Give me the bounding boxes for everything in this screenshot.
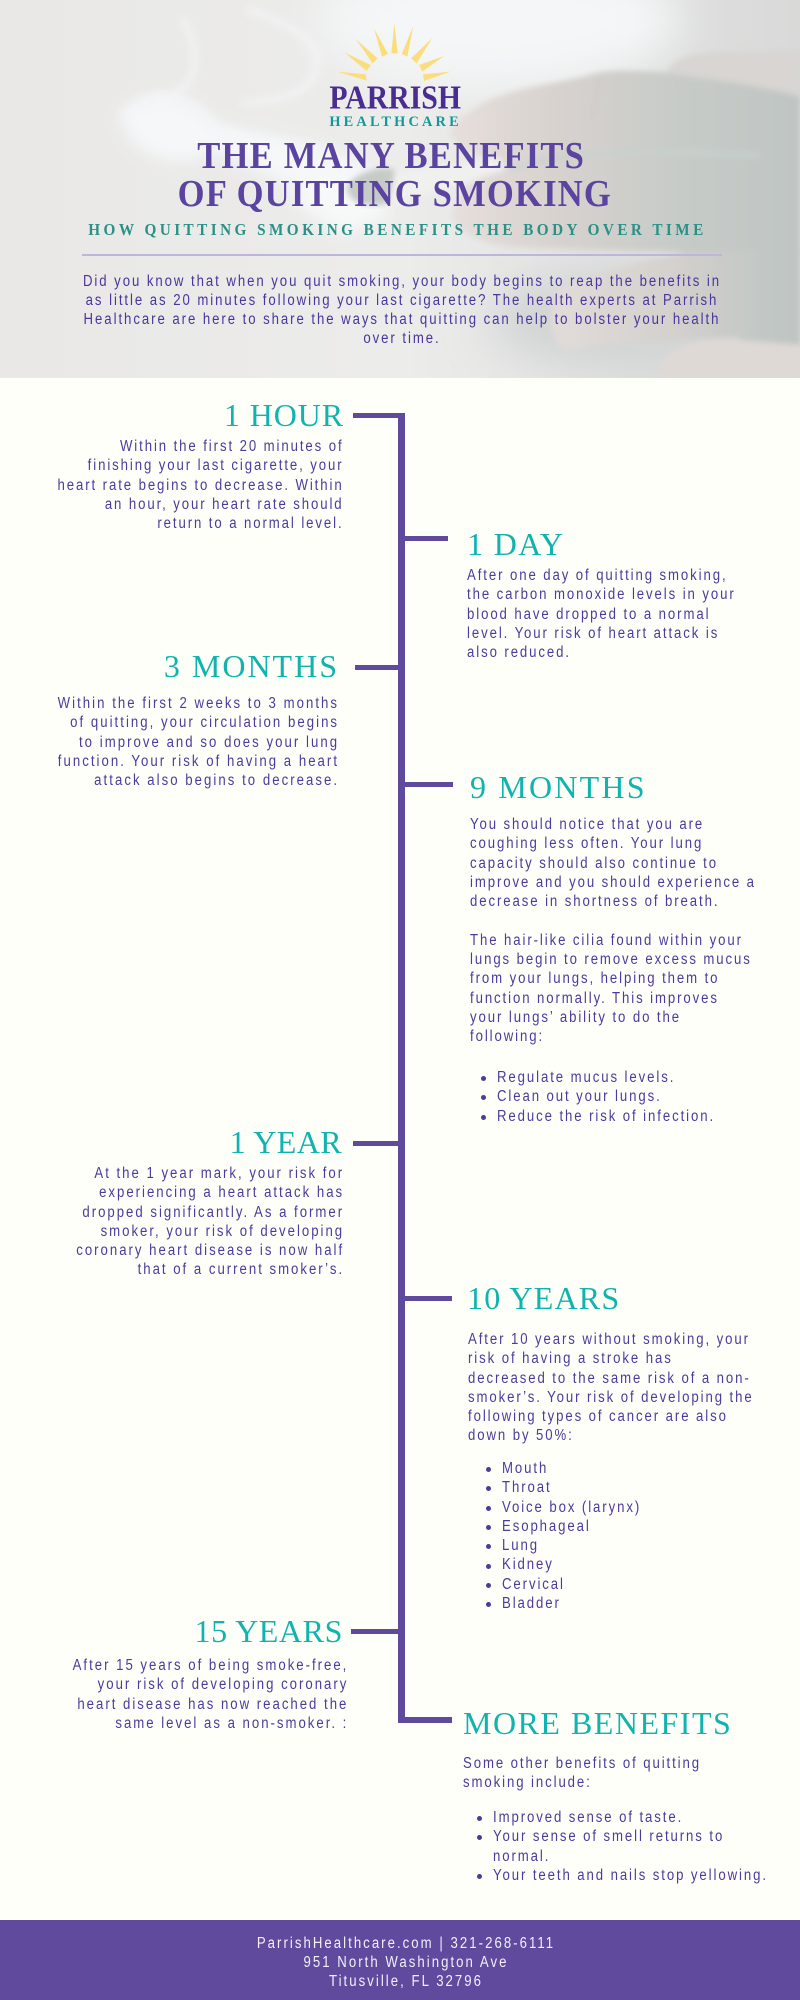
intro text: Healthcare are here to share the ways that quitting can help to bolster your health	[84, 311, 720, 328]
text: After 15 years of being smoke-free,	[72, 1657, 348, 1674]
text: After 10 years without smoking, your	[468, 1331, 750, 1348]
text	[72, 1657, 348, 1732]
heading: 15 YEARS	[194, 1613, 343, 1649]
footer contact text: 951 North Washington Ave	[304, 1954, 508, 1971]
text: improve and you should experience a	[470, 874, 756, 891]
list: Regulate mucus levels.	[497, 1069, 675, 1086]
section: 1 year	[76, 1124, 344, 1278]
tick: 9 months	[404, 782, 453, 787]
text: smoker, your risk of developing	[100, 1223, 344, 1240]
text: an hour, your heart rate should	[105, 496, 344, 513]
intro text: over time.	[363, 330, 441, 347]
list: Esophageal	[502, 1518, 591, 1535]
section: 9 months	[470, 769, 756, 1125]
text: function. Your risk of having a heart	[58, 753, 339, 770]
list: Bladder	[502, 1595, 561, 1612]
text: coughing less often. Your lung	[470, 835, 703, 852]
text: You should notice that you are	[470, 816, 704, 833]
text: smoker’s. Your risk of developing the	[468, 1389, 754, 1406]
section: 1 hour	[58, 397, 344, 532]
text: the carbon monoxide levels in your	[467, 586, 736, 603]
heading: 1 HOUR	[224, 397, 344, 433]
text: The hair-like cilia found within your	[470, 932, 743, 949]
text: smoking include:	[463, 1774, 592, 1791]
text: from your lungs, helping them to	[470, 970, 719, 987]
text: After one day of quitting smoking,	[467, 567, 728, 584]
list: Your teeth and nails stop yellowing.	[493, 1867, 768, 1884]
tick: 3 months	[355, 665, 399, 670]
tick: 15 years	[351, 1629, 399, 1634]
section: 15 years	[72, 1613, 348, 1732]
text: decreased to the same risk of a non-	[468, 1370, 751, 1387]
list	[481, 1069, 715, 1125]
section: 10 years	[467, 1280, 754, 1612]
tick: 1 year	[353, 1141, 399, 1146]
text: level. Your risk of heart attack is	[467, 625, 719, 642]
title	[178, 135, 612, 214]
footer contact text	[257, 1935, 555, 1990]
list	[477, 1809, 768, 1884]
text: Within the first 20 minutes of	[120, 438, 344, 455]
list: Your sense of smell returns to	[493, 1828, 724, 1845]
list: Throat	[502, 1479, 552, 1496]
subtitle: HOW QUITTING SMOKING BENEFITS THE BODY OVER TIME	[88, 220, 707, 239]
tick: 1 day	[404, 536, 448, 541]
list: Improved sense of taste.	[493, 1809, 683, 1826]
intro text	[83, 273, 721, 347]
footer contact text: Titusville, FL 32796	[329, 1973, 483, 1990]
heading: 10 YEARS	[467, 1280, 620, 1316]
title: OF QUITTING SMOKING	[178, 172, 612, 214]
text: following:	[470, 1028, 544, 1045]
logo	[329, 24, 461, 130]
text: return to a normal level.	[158, 515, 344, 532]
logo wordmark: PARRISH	[329, 80, 461, 117]
text: Within the first 2 weeks to 3 months	[58, 695, 339, 712]
header photo background	[0, 0, 800, 378]
text	[58, 438, 344, 532]
divider	[82, 254, 722, 256]
section: 3 months	[58, 648, 339, 789]
intro text: Did you know that when you quit smoking, your body begins to reap the benefits in	[83, 273, 721, 290]
text: dropped significantly. As a former	[82, 1204, 344, 1221]
list: Lung	[502, 1537, 539, 1554]
text	[76, 1165, 344, 1278]
section: 1 day	[467, 526, 736, 661]
hand	[450, 50, 800, 378]
list: Voice box (larynx)	[502, 1499, 641, 1516]
list: Mouth	[502, 1460, 548, 1477]
list: Reduce the risk of infection.	[497, 1108, 715, 1125]
text: Some other benefits of quitting	[463, 1755, 701, 1772]
text: lungs begin to remove excess mucus	[470, 951, 752, 968]
text: that of a current smoker’s.	[138, 1261, 344, 1278]
text: also reduced.	[467, 644, 571, 661]
text: same level as a non-smoker. :	[115, 1715, 348, 1732]
text: decrease in shortness of breath.	[470, 893, 719, 910]
timeline spine	[398, 413, 405, 1723]
text: your lungs’ ability to do the	[470, 1009, 681, 1026]
heading: MORE BENEFITS	[463, 1705, 732, 1741]
text: capacity should also continue to	[470, 855, 718, 872]
title: THE MANY BENEFITS	[197, 135, 585, 177]
list: Kidney	[502, 1556, 554, 1573]
text: down by 50%:	[468, 1427, 574, 1444]
tick: more benefits	[404, 1717, 452, 1723]
section: more benefits	[463, 1705, 768, 1884]
heading: 9 MONTHS	[470, 769, 647, 805]
logo subtitle: HEALTHCARE	[329, 114, 459, 130]
text: your risk of developing coronary	[97, 1676, 348, 1693]
heading: 3 MONTHS	[164, 648, 339, 684]
text: experiencing a heart attack has	[99, 1184, 344, 1201]
text: to improve and so does your lung	[79, 734, 339, 751]
list	[486, 1460, 641, 1612]
footer	[0, 1920, 800, 2000]
text	[463, 1755, 701, 1791]
text	[58, 695, 339, 789]
heading: 1 DAY	[467, 526, 564, 562]
text: At the 1 year mark, your risk for	[94, 1165, 344, 1182]
text: coronary heart disease is now half	[76, 1242, 344, 1259]
text: of quitting, your circulation begins	[70, 714, 339, 731]
text: finishing your last cigarette, your	[88, 457, 344, 474]
text	[470, 816, 756, 1045]
text: function normally. This improves	[470, 990, 719, 1007]
text: heart disease has now reached the	[77, 1696, 348, 1713]
tick: 1 hour	[353, 413, 399, 418]
text: risk of having a stroke has	[468, 1350, 673, 1367]
list: Clean out your lungs.	[497, 1088, 662, 1105]
tick: 10 years	[404, 1296, 452, 1301]
list: Cervical	[502, 1576, 565, 1593]
text: attack also begins to decrease.	[94, 772, 339, 789]
text: heart rate begins to decrease. Within	[58, 477, 344, 494]
intro text: as little as 20 minutes following your last cigarette? The health experts at Parrish	[86, 292, 718, 309]
icon: sun rays	[337, 23, 451, 81]
text: following types of cancer are also	[468, 1408, 728, 1425]
heading: 1 YEAR	[230, 1124, 342, 1160]
list: normal.	[493, 1848, 550, 1865]
footer contact text: ParrishHealthcare.com | 321-268-6111	[257, 1935, 555, 1952]
text: blood have dropped to a normal	[467, 606, 710, 623]
text	[468, 1331, 754, 1444]
timeline	[351, 413, 453, 1723]
text	[467, 567, 736, 661]
